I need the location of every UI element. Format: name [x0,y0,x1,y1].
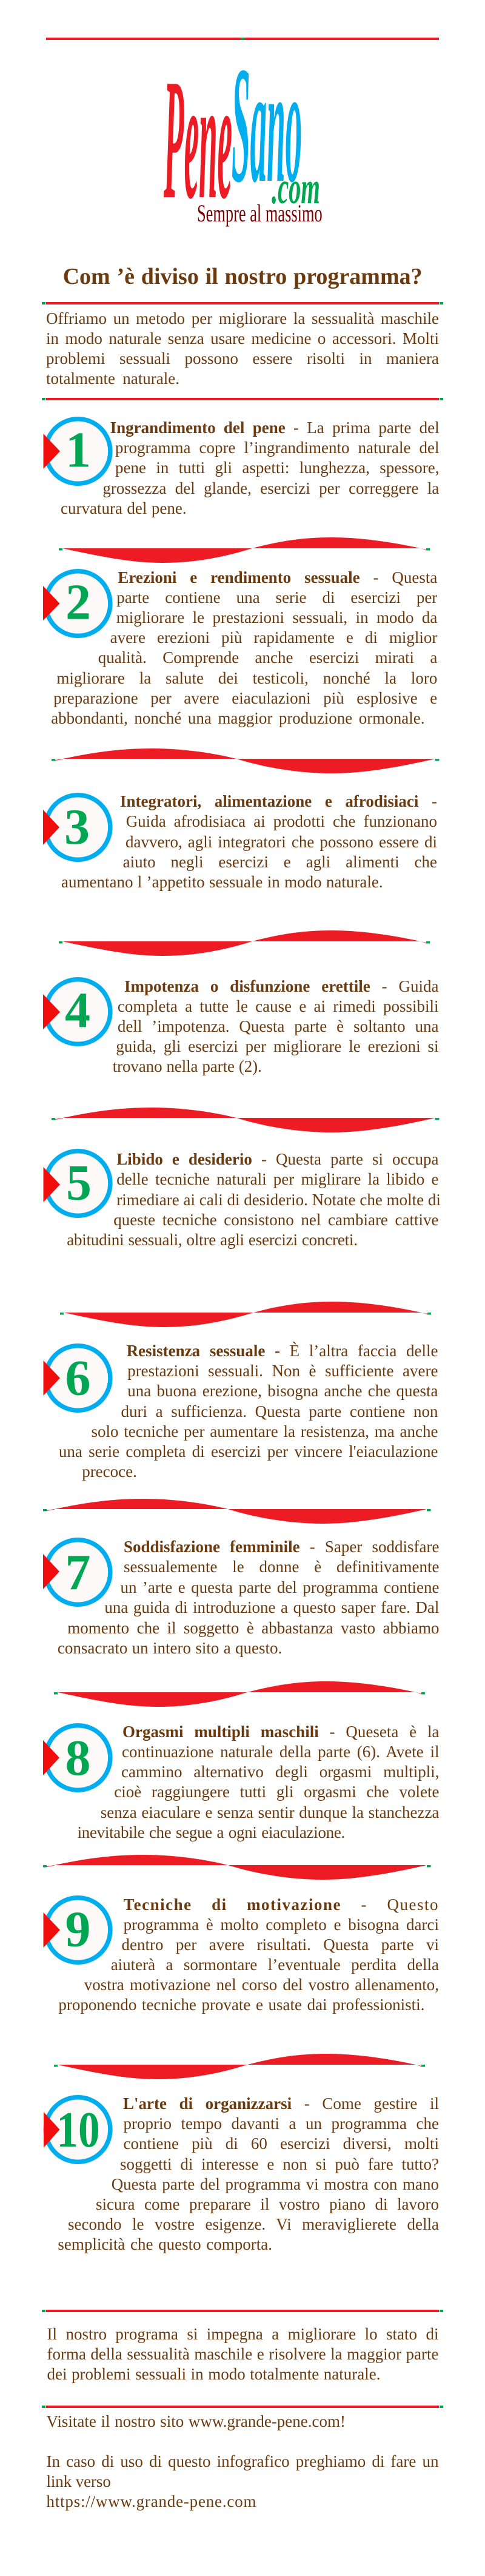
item 5 text: rimediare ai cali di desiderio. Notate che molte di [116,1191,441,1209]
item 7 text: momento che il soggetto è abbastanza vasto abbiamo [67,1619,439,1637]
item 10 text: sicura come preparare il vostro piano di lavoro [96,2195,439,2213]
item 3 text: aumentano l ’appetito sessuale in modo naturale. [61,873,383,891]
badge 4 [43,977,113,1046]
divider 8 [43,1855,430,1880]
item 8 text: cammino alternativo degli orgasmi multipli, [121,1763,439,1781]
item 7 text: una guida di introduzione a questo saper fare. Dal [104,1598,439,1616]
badge 8 [43,1723,113,1792]
badge 5: 5 [66,1155,92,1211]
badge 7: 7 [65,1545,91,1601]
divider 5 [60,1302,431,1327]
divider 4 [52,1108,439,1132]
footer text [0,2412,485,2512]
item 5 text: abitudini sessuali, oltre agli esercizi concreti. [67,1231,358,1249]
item 6 text: una buona erezione, bisogna anche che questa [127,1382,438,1400]
item 9 text: Tecniche di motivazione - Questo [124,1895,439,1914]
item 8 text: inevitabile che segue a ogni eiaculazione. [78,1823,345,1841]
intro text: totalmente naturale. [46,369,179,388]
item 1 text: grossezza del glande, esercizi per correggere la [102,479,439,497]
item 3 text: Integratori, alimentazione e afrodisiaci - [120,792,437,810]
closing text: forma della sessualità maschile e risolvere la maggior parte [47,2345,439,2363]
logo: PeneSano.com [164,67,323,230]
item 9 text: vostra motivazione nel corso del vostro allenamento, [84,1976,439,1994]
badge 9: 9 [65,1901,91,1957]
item 2 text: preparazione per avere eiaculazioni più esplosive e [53,689,437,707]
item 6 text [59,1342,438,1481]
item 10 text: soggetti di interesse e non si può fare tutto? [120,2155,439,2173]
item 8 text: continuazione naturale della parte (6). Avete il [122,1743,439,1761]
item 3 text [61,792,437,891]
intro text: Offriamo un metodo per migliorare la sessualità maschile [46,309,439,328]
item 5 text: queste tecniche consistono nel cambiare cattive [113,1211,438,1229]
item 7 text: sessualemente le donne è definitivamente [124,1558,439,1576]
item 7 text: consacrato un intero sito a questo. [58,1639,282,1657]
title: Com ’è diviso il nostro programma? [63,264,423,289]
item 7 text: un ’arte e questa parte del programma contiene [120,1578,439,1596]
divider 3 [59,930,430,956]
heading rule [42,302,443,304]
badge 1 [44,417,113,486]
footer text: link verso [46,2472,111,2490]
item 10 text: contiene più di 60 esercizi diversi, molti [124,2134,439,2153]
item 4 text: completa a tutte le cause e ai rimedi possibili [118,997,438,1015]
panel: item 5 [44,1149,441,1249]
intro text: problemi sessuali possono essere risolti in maniera [46,349,439,368]
item 9 text: proponendo tecniche provate e usate dai professionisti. [58,1996,424,2014]
item 10 text: semplicità che questo comporta. [58,2235,272,2253]
intro rule [42,398,443,400]
item 6 text: una serie completa di esercizi per vincere l'eiaculazione [59,1442,438,1461]
badge 2: 2 [65,574,91,630]
footer text: In caso di uso di questo infografico preghiamo di fare un [46,2452,439,2470]
item 8 text [78,1723,439,1841]
item 6 text: prestazioni sessuali. Non è sufficiente avere [127,1362,438,1380]
footer text: Visitate il nostro sito www.grande-pene.com! [46,2412,346,2430]
divider 2 [52,748,439,773]
item 1 text: programma copre l’ingrandimento naturale del [115,439,439,457]
badge 7 [43,1538,113,1607]
item 1 text: Ingrandimento del pene - La prima parte del [110,419,440,437]
badge 10: 10 [56,2102,100,2157]
closing rule [0,2310,485,2312]
logo: PeneSano.com: .com [272,163,320,214]
panel: item 8 [43,1723,439,1841]
item 6 text: solo tecniche per aumentare la resistenza, ma anche [91,1422,438,1441]
panel: item 2 [43,568,438,727]
logo: PeneSano.com: Sempre al massimo [197,201,323,227]
item 8 text: Orgasmi multipli maschili - Queseta è la [122,1723,439,1741]
footer rule [0,2406,485,2408]
item 2 text: migliorare la salute dei testicoli, nonché la loro [56,669,437,687]
item 10 text: secondo le vostre esigenze. Vi meraviglierete della [68,2215,439,2233]
top rule [46,38,439,40]
badge 6 [44,1343,113,1413]
divider 7 [54,1681,425,1707]
closing text: dei problemi sessuali in modo totalmente naturale. [47,2365,381,2383]
item 2 text: migliorare le prestazioni sessuali, in modo da [116,608,437,627]
badge 3 [43,793,113,862]
item 10 text: proprio tempo davanti a un programma che [124,2114,439,2133]
item 9 text: aiuterà a sormontare l’eventuale perdita della [111,1956,439,1974]
panel: item 7 [43,1538,439,1657]
panel: item 3 [43,792,437,891]
item 4 text: guida, gli esercizi per migliorare le erezioni si [116,1037,438,1055]
panel: item 9 [44,1895,439,2014]
item 1 text: curvatura del pene. [61,499,187,517]
badge 2 [43,569,113,638]
badge 3: 3 [64,799,90,855]
badge 10 [42,2094,115,2165]
item 4 text: trovano nella parte (2). [113,1057,262,1075]
panel: item 10 [0,2094,485,2255]
item 2 text: qualità. Comprende anche esercizi mirati a [98,648,437,667]
item 3 text: Guida afrodisiaca ai prodotti che funzionano [126,812,437,830]
item 7 text: Soddisfazione femminile - Saper soddisfare [124,1538,439,1556]
item 2 text: parte contiene una serie di esercizi per [116,588,437,607]
item 2 text: abbondanti, nonché una maggior produzione ormonale. [51,709,424,727]
item 4 text: dell ’impotenza. Questa parte è soltanto una [118,1017,438,1035]
intro text: in modo naturale senza usare medicine o accessori. Molti [46,329,439,348]
item 2 text [51,568,438,727]
badge 6: 6 [65,1350,91,1406]
panel: item 1 [44,417,440,517]
item 9 text: programma è molto completo e bisogna darci [124,1915,439,1934]
item 5 text: delle tecniche naturali per miglirare la libido e [116,1170,438,1188]
divider 9 [54,2053,442,2082]
item 3 text: davvero, agli integratori che possono essere di [125,833,437,851]
item 1 text [61,419,440,517]
item 9 text: dentro per avere risultati. Questa parte vi [121,1935,439,1954]
item 6 text: duri a sufficienza. Questa parte contiene non [121,1402,438,1421]
item 9 text [58,1895,439,2014]
divider 1 [59,537,430,563]
item 4 text [113,977,439,1075]
badge 4: 4 [65,983,90,1039]
item 10 text: L'arte di organizzarsi - Come gestire il [123,2094,439,2113]
panel: item 6 [44,1342,438,1481]
closing text: Il nostro programa si impegna a migliorare lo stato di [47,2325,439,2343]
item 5 text: Libido e desiderio - Questa parte si occupa [116,1150,438,1168]
item 8 text: cioè raggiungere tutti gli orgasmi che volete [114,1783,439,1801]
badge 5 [44,1149,113,1218]
footer text: https://www.grande-pene.com [46,2492,256,2510]
item 8 text: senza eiaculare e senza sentir dunque la stanchezza [101,1803,439,1821]
item 2 text: Erezioni e rendimento sessuale - Questa [118,568,437,587]
item 6 text: Resistenza sessuale - È l’altra faccia delle [127,1342,438,1360]
item 3 text: aiuto negli esercizi e agli alimenti che [123,853,437,871]
badge 8: 8 [65,1729,91,1786]
item 7 text [58,1538,439,1657]
item 5 text [67,1150,441,1249]
item 6 text: precoce. [82,1462,137,1481]
badge 9 [44,1895,113,1965]
divider 6 [43,1499,430,1524]
panel: item 4 [43,977,439,1075]
item 10 text [0,2094,485,2255]
item 2 text: avere erezioni più rapidamente e di miglior [110,628,437,647]
item 10 text: Questa parte del programma vi mostra con mano [112,2175,439,2193]
item 4 text: Impotenza o disfunzione erettile - Guida [124,977,438,995]
badge 1: 1 [65,422,91,478]
intro text [46,309,439,388]
item 1 text: pene in tutti gli aspetti: lunghezza, spessore, [115,459,439,477]
closing text [0,2324,485,2384]
